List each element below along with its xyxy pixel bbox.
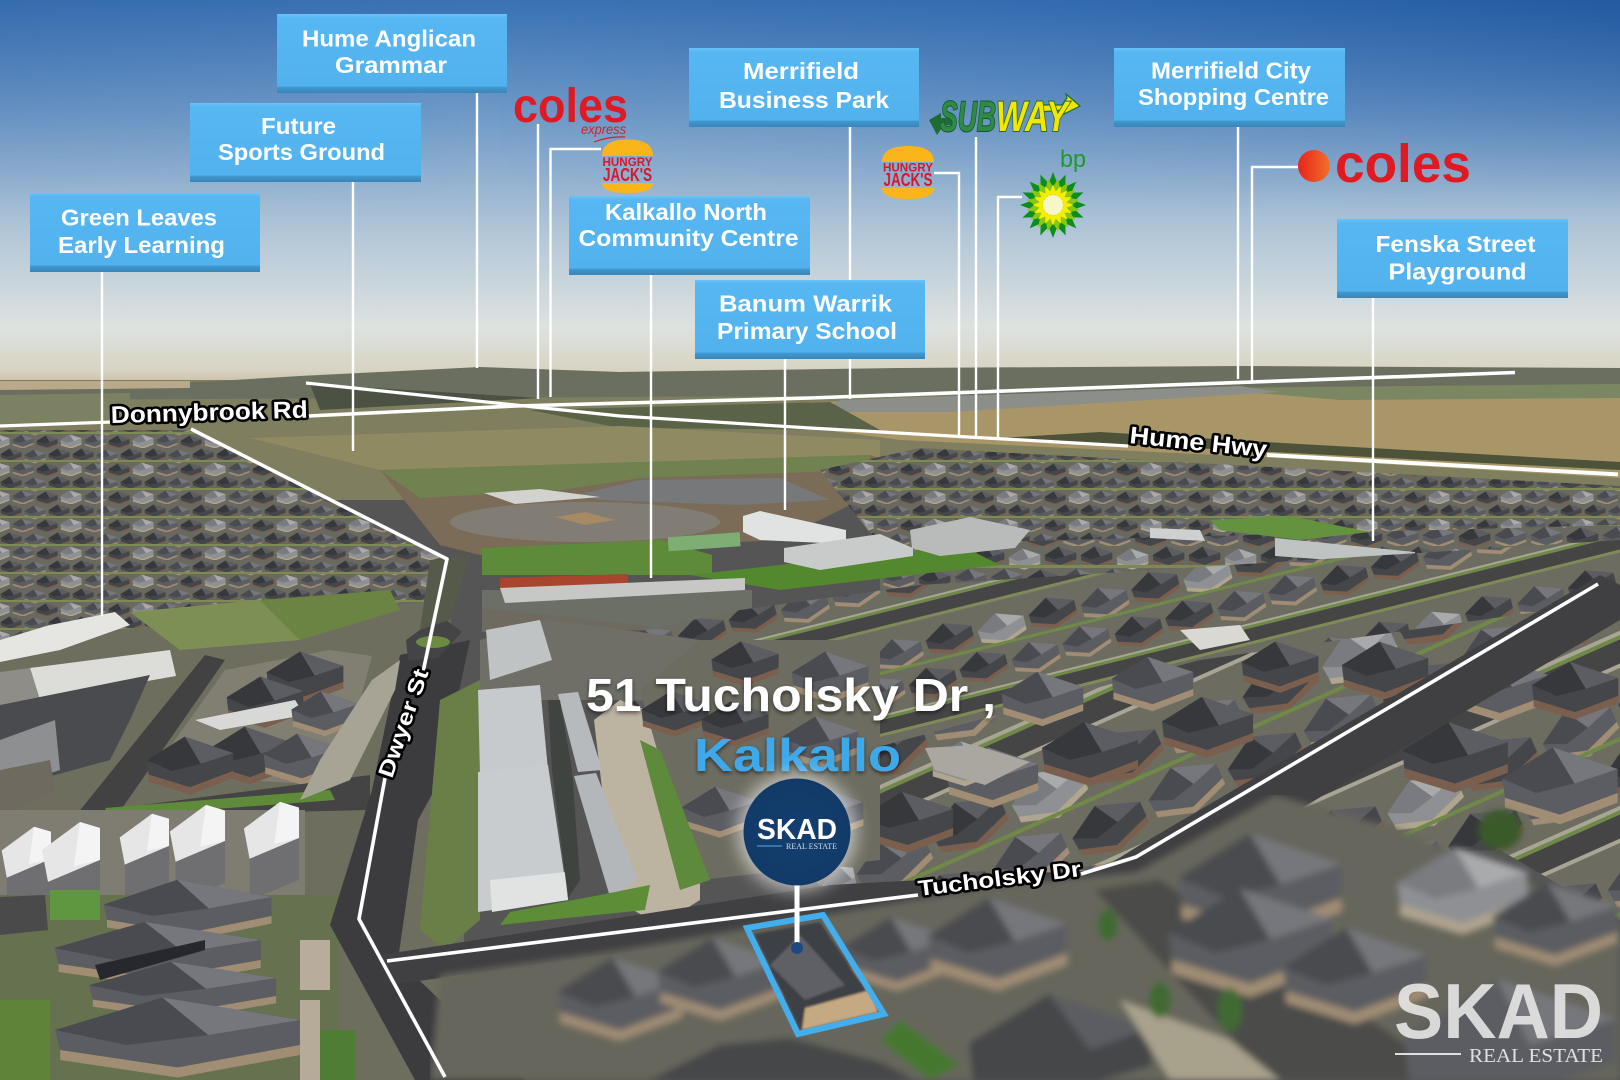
- callout: Future Sports Ground: [190, 103, 421, 182]
- callout: Merrifield Business Park: Business Park: [719, 87, 889, 113]
- SKAD Real Estate watermark: REAL ESTATE: [1469, 1045, 1603, 1067]
- callout: Banum Warrik Primary School: [695, 280, 925, 359]
- road label: Dwyer St: Dwyer St: [373, 665, 434, 781]
- callout: Banum Warrik Primary School: Primary School: [717, 318, 897, 344]
- callout: Kalkallo North Community Centre: Kalkallo North: [605, 199, 767, 225]
- logo: Subway: WAY: [996, 93, 1071, 141]
- cross street and lawn: [105, 775, 370, 815]
- distant hills and farmland: [0, 366, 1620, 500]
- callout: Fenska Street Playground: Playground: [1388, 258, 1526, 284]
- logo: Subway: SUB: [940, 93, 996, 141]
- callout: Merrifield City Shopping Centre: Shopping Centre: [1138, 84, 1329, 110]
- title: property address: [586, 669, 996, 781]
- logo: Hungry Jack's (left): [602, 140, 653, 193]
- callout: Kalkallo North Community Centre: [569, 196, 810, 275]
- logo: Hungry Jack's (left): JACK'S: [603, 165, 652, 185]
- logo: Hungry Jack's (right): HUNGRY: [883, 160, 933, 174]
- dark roof block: [147, 650, 372, 794]
- callout: Green Leaves Early Learning: Green Leaves: [61, 204, 217, 230]
- road lines: [0, 372, 1618, 1077]
- callout: Fenska Street Playground: Fenska Street: [1376, 231, 1536, 257]
- logo: Subway: [929, 93, 1080, 141]
- townhouse complex: [420, 620, 700, 950]
- white two-storey homes: [0, 802, 305, 926]
- road label: Donnybrook Rd: Donnybrook Rd: [110, 397, 308, 429]
- right residential, far band: [820, 448, 1620, 545]
- subject property roof: [754, 922, 880, 1030]
- logo: Hungry Jack's (right): JACK'S: [884, 170, 932, 190]
- subject property outline: [747, 915, 884, 1034]
- community centre: [482, 574, 752, 632]
- callout: Fenska Street Playground: [1337, 219, 1568, 298]
- left lower estate ground: [0, 600, 470, 1080]
- logo: Coles Express: express: [581, 121, 626, 137]
- house clusters right: [862, 625, 1618, 853]
- homes north of Tucholsky near marker: [640, 640, 880, 890]
- callout: Hume Anglican Grammar: [277, 14, 507, 93]
- location pin with SKAD badge: SKAD: [757, 814, 837, 846]
- callout: Green Leaves Early Learning: Early Learning: [58, 232, 225, 258]
- callout: Merrifield City Shopping Centre: [1114, 48, 1345, 127]
- title: property address: 51 Tucholsky Dr ,: [586, 669, 996, 721]
- callout: Merrifield City Shopping Centre: Merrifield City: [1151, 58, 1311, 84]
- callout: Hume Anglican Grammar: Grammar: [335, 52, 447, 78]
- callout: Merrifield Business Park: [689, 48, 919, 127]
- main estate, mid distance: [600, 540, 1620, 900]
- side street: [40, 655, 225, 860]
- callout: Merrifield Business Park: Merrifield: [743, 58, 859, 84]
- callout leader lines: [102, 93, 1373, 616]
- road label: Hume Hwy: Hume Hwy: [1128, 422, 1269, 463]
- logo: Coles: coles: [1335, 134, 1471, 194]
- logo: Coles Express: coles: [513, 80, 628, 133]
- SKAD Real Estate watermark: SKAD: [1394, 967, 1603, 1055]
- blurred foreground homes: [430, 795, 1620, 1080]
- callout: Hume Anglican Grammar: Hume Anglican: [302, 26, 476, 52]
- callout: Banum Warrik Primary School: Banum Warrik: [719, 290, 892, 316]
- location pin with SKAD badge: REAL ESTATE: [786, 841, 837, 851]
- Tucholsky Dr carriageway: [380, 575, 1620, 985]
- logo: BP: [1020, 146, 1086, 238]
- title: property address: Kalkallo: [694, 729, 901, 781]
- left residential estate, far: [0, 430, 447, 640]
- large grey homes lower left: [0, 880, 355, 1080]
- callout: Future Sports Ground: Sports Ground: [218, 139, 385, 165]
- callout: Future Sports Ground: Future: [261, 113, 336, 139]
- sky: [0, 0, 1620, 385]
- school and sports lawns: [482, 511, 1415, 590]
- main estate, near right: [830, 600, 1620, 920]
- logo: Hungry Jack's (left): HUNGRY: [602, 155, 652, 169]
- logo: BP: bp: [1060, 146, 1086, 173]
- location pin with SKAD badge: [737, 772, 857, 954]
- construction site fields: [380, 455, 940, 555]
- Dwyer St carriageway: [300, 555, 525, 1080]
- white estate buildings left: [0, 590, 400, 810]
- callout: Kalkallo North Community Centre: Community Centre: [578, 225, 798, 251]
- logo: Hungry Jack's (right): [882, 146, 934, 199]
- road label: Tucholsky Dr: Tucholsky Dr: [917, 856, 1083, 901]
- callout: Green Leaves Early Learning: [30, 193, 260, 272]
